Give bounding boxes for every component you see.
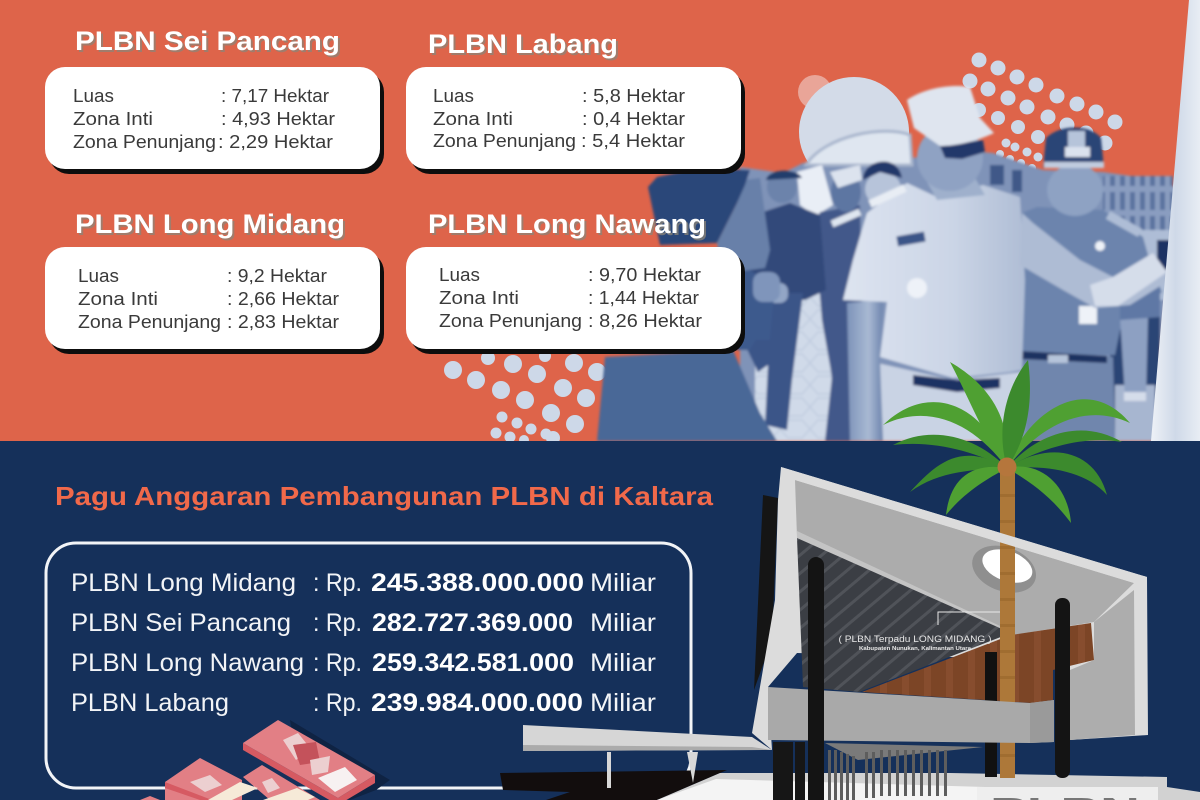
frame xyxy=(752,467,1148,750)
panel: PLBN Labang xyxy=(406,29,745,174)
budget table: Miliar xyxy=(590,609,656,637)
striped wall xyxy=(797,538,1011,692)
card text: Zona Penunjang xyxy=(433,131,576,151)
card text: Zona Inti xyxy=(78,289,158,309)
building caption xyxy=(838,634,992,652)
card text xyxy=(439,265,702,331)
card xyxy=(45,67,380,169)
white paper xyxy=(797,165,833,216)
heading: budget title: Pagu Anggaran Pembangunan PLBN di Kaltara xyxy=(55,481,714,511)
left canopy xyxy=(523,725,772,751)
budget table: 245.388.000.000 xyxy=(371,569,584,597)
man in dark uniform xyxy=(745,171,826,430)
card text: Zona Penunjang xyxy=(439,311,582,331)
heading: PLBN Long Nawang xyxy=(430,211,708,241)
left man in foreground xyxy=(597,168,780,441)
roof band xyxy=(781,467,1147,583)
heading: PLBN Sei Pancang xyxy=(77,28,342,58)
heading: PLBN Labang xyxy=(428,29,618,59)
panel: PLBN Long Nawang xyxy=(406,209,745,354)
man with cap behind xyxy=(817,165,862,441)
budget table: Miliar xyxy=(590,689,656,717)
right background xyxy=(1110,230,1173,441)
map board at right edge xyxy=(1151,0,1200,441)
main man xyxy=(843,86,1170,441)
card text: : 0,4 Hektar xyxy=(582,109,685,129)
heading: PLBN Labang xyxy=(430,31,620,61)
card shadow xyxy=(49,72,384,174)
building caption: Kabupaten Nunukan, Kalimantan Utara xyxy=(859,646,972,652)
budget table: PLBN Long Nawang xyxy=(71,649,304,677)
card text xyxy=(78,266,339,332)
heading: PLBN Long Midang xyxy=(75,209,345,239)
decoration: large grey circle xyxy=(799,77,909,187)
sign block xyxy=(977,787,1158,800)
card text: : 5,8 Hektar xyxy=(582,86,685,106)
photo background xyxy=(740,150,1177,441)
building caption: ( PLBN Terpadu LONG MIDANG ) xyxy=(838,634,992,645)
panel: orange top background xyxy=(0,0,1200,441)
card text: : 9,2 Hektar xyxy=(227,266,327,286)
card shadow xyxy=(49,252,384,354)
panel: navy bottom background xyxy=(0,441,1200,800)
budget table: PLBN Sei Pancang xyxy=(71,609,291,637)
card text: : 7,17 Hektar xyxy=(221,86,329,106)
left column xyxy=(808,557,824,800)
card xyxy=(406,67,741,169)
background arch xyxy=(806,131,912,165)
card text: : 5,4 Hektar xyxy=(581,131,685,151)
icon: palm crown xyxy=(883,360,1130,523)
man with glasses behind xyxy=(863,162,902,206)
budget table: : Rp. xyxy=(313,689,362,717)
right wall xyxy=(1070,590,1135,740)
card text: Luas xyxy=(78,266,119,286)
heading: PLBN Long Nawang xyxy=(428,209,706,239)
heading: PLBN Sei Pancang xyxy=(75,26,340,56)
card text: : 2,29 Hektar xyxy=(218,132,333,152)
budget table: Miliar xyxy=(590,649,656,677)
card xyxy=(45,247,380,349)
card text xyxy=(433,86,685,151)
card text: : 8,26 Hektar xyxy=(588,311,702,331)
rear black wall xyxy=(754,495,778,690)
budget table xyxy=(71,569,656,717)
decoration: lower left dots xyxy=(444,350,606,445)
budget table: : Rp. xyxy=(313,569,362,597)
grey slats xyxy=(825,743,983,760)
ceiling xyxy=(795,480,1134,635)
ground xyxy=(500,770,727,800)
icon: money stacks xyxy=(140,720,390,800)
budget box outline xyxy=(46,543,691,788)
card shadow xyxy=(410,72,745,174)
panel: PLBN Long Midang xyxy=(45,209,384,354)
support columns xyxy=(773,742,793,800)
heading: PLBN Long Midang xyxy=(77,211,347,241)
budget table: : Rp. xyxy=(313,609,362,637)
card text: Zona Inti xyxy=(433,109,513,129)
decoration: upper right dots xyxy=(962,52,1122,172)
photo: officials inspecting the site xyxy=(597,86,1177,441)
budget table: Miliar xyxy=(590,569,656,597)
budget table: PLBN Labang xyxy=(71,689,229,717)
card text: Luas xyxy=(73,86,114,106)
decoration: small pink circle xyxy=(798,75,832,109)
wood wall xyxy=(862,623,1094,703)
card text: : 1,44 Hektar xyxy=(588,288,699,308)
card text: : 2,83 Hektar xyxy=(227,312,339,332)
fence xyxy=(1103,176,1173,230)
budget table: 259.342.581.000 xyxy=(372,649,574,677)
panel: PLBN Sei Pancang xyxy=(45,26,384,174)
slab xyxy=(768,687,1054,743)
budget table: PLBN Long Midang xyxy=(71,569,296,597)
card text: Zona Inti xyxy=(439,288,519,308)
building: PLBN Terpadu Long Midang xyxy=(500,467,1200,800)
card text: Zona Inti xyxy=(73,109,153,129)
card text: Zona Penunjang xyxy=(73,132,216,152)
leader line xyxy=(938,612,1000,625)
right man xyxy=(1020,128,1162,441)
budget table: 239.984.000.000 xyxy=(371,689,583,717)
card text: : 9,70 Hektar xyxy=(588,265,701,285)
paved ground xyxy=(755,265,838,441)
card text: : 4,93 Hektar xyxy=(221,109,335,129)
skylight xyxy=(966,537,1043,601)
budget table: 282.727.369.000 xyxy=(372,609,573,637)
palm trunk xyxy=(1000,468,1015,778)
right column xyxy=(1055,598,1070,778)
card text: : 2,66 Hektar xyxy=(227,289,339,309)
card shadow xyxy=(410,252,745,354)
card text xyxy=(73,86,335,152)
card text: Zona Penunjang xyxy=(78,312,221,332)
card xyxy=(406,247,741,349)
card text: Luas xyxy=(433,86,474,106)
short black column xyxy=(985,652,997,777)
budget table: : Rp. xyxy=(313,649,362,677)
crowd behind xyxy=(990,165,1022,192)
card text: Luas xyxy=(439,265,480,285)
